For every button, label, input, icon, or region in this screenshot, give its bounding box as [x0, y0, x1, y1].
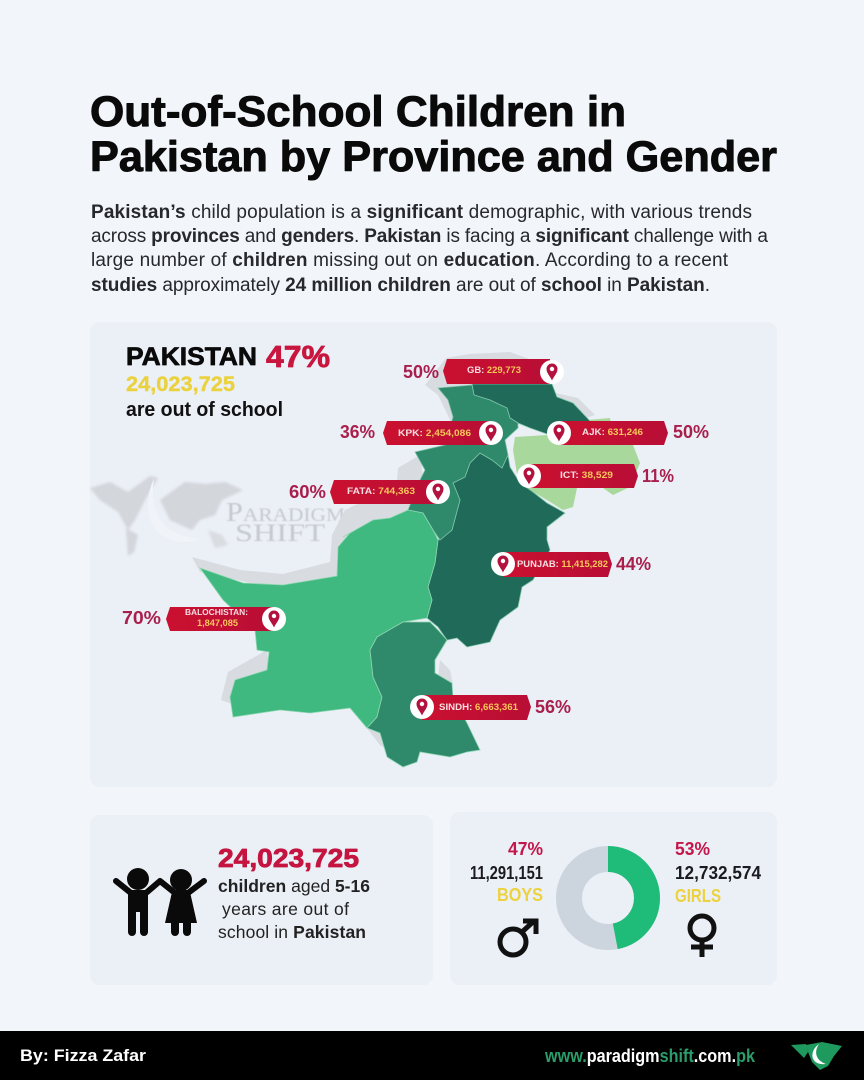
intro paragraph: large number of children missing out on education. According to a recent: [91, 250, 729, 271]
icon: two children holding hands: [116, 868, 204, 936]
callout: FATA: 60%: [289, 482, 326, 502]
intro paragraph: [91, 202, 768, 296]
callout: Balochistan: [122, 607, 286, 631]
panel: map: [90, 322, 777, 787]
callout: Sindh: [410, 695, 571, 720]
watermark logo: [90, 476, 345, 556]
title: [90, 88, 777, 181]
callout: Punjab: [491, 552, 651, 577]
boys stats: BOYS: [497, 885, 543, 905]
map of Pakistan: [192, 352, 640, 767]
callout: Balochistan: 1,847,085: [197, 618, 239, 629]
callout: Punjab: PUNJAB: 11,415,282: [517, 559, 608, 570]
title: Out-of-School Children in: [90, 88, 626, 136]
national headline: 47%: [266, 339, 330, 374]
icon: male symbol: [500, 921, 536, 955]
callout: GB: GB: 229,773: [467, 365, 521, 376]
callout: FATA: [289, 480, 450, 504]
callout: FATA: FATA: 744,363: [347, 486, 415, 497]
callout: ICT: ICT: 38,529: [560, 470, 613, 481]
callout: Punjab: 44%: [616, 554, 651, 574]
logo: green world map with crescent: [791, 1042, 842, 1070]
region: Balochistan: [200, 510, 438, 728]
boys stats: [470, 839, 543, 905]
callout: Sindh: SINDH: 6,663,361: [439, 702, 519, 713]
national headline: [126, 339, 330, 421]
national headline: 24,023,725: [126, 373, 235, 396]
map shadow: [192, 352, 595, 750]
girls stats: [675, 839, 761, 906]
watermark logo: SHIFT: [235, 520, 325, 547]
boys stats: 11,291,151: [470, 863, 543, 883]
footer bar: [0, 1031, 864, 1080]
region: Sindh: [367, 622, 480, 767]
boys stats: 47%: [508, 839, 543, 859]
national headline: PAKISTAN: [126, 343, 257, 371]
girls stats: GIRLS: [675, 886, 721, 906]
panel: gender split: [450, 812, 777, 985]
author credit: By: Fizza Zafar: [20, 1046, 146, 1065]
girls stats: 12,732,574: [675, 863, 761, 883]
icon: female symbol: [690, 916, 714, 957]
region: Punjab: [427, 453, 565, 647]
callout: Sindh: 56%: [535, 697, 571, 717]
region: KPK and FATA: [408, 385, 518, 540]
children total text: school in Pakistan: [218, 922, 366, 942]
callout: AJK: AJK: 631,246: [582, 427, 643, 438]
callout: ICT: [517, 464, 674, 488]
watermark logo: PARADIGM: [226, 497, 345, 527]
national headline: are out of school: [126, 399, 283, 421]
website url: www.paradigmshift.com.pk: [544, 1046, 756, 1066]
children total text: years are out of: [222, 899, 349, 919]
intro paragraph: studies approximately 24 million children are out of school in Pakistan.: [91, 275, 710, 296]
callout: Balochistan: 70%: [122, 608, 161, 628]
callout: GB: 50%: [403, 362, 439, 382]
children total text: children aged 5-16: [218, 876, 370, 896]
callout: AJK: [547, 421, 709, 445]
callout: GB: [403, 359, 564, 384]
callout: ICT: 11%: [642, 466, 674, 486]
panel: children total: [90, 815, 433, 985]
intro paragraph: Pakistan’s child population is a significant demographic, with various trends: [91, 202, 752, 223]
girls stats: 53%: [675, 839, 710, 859]
donut chart: [569, 859, 647, 937]
children total text: [218, 843, 370, 942]
callout: KPK: 36%: [340, 422, 375, 442]
title: Pakistan by Province and Gender: [90, 133, 777, 181]
intro paragraph: across provinces and genders. Pakistan is facing a significant challenge with a: [91, 226, 768, 247]
callout: Balochistan: BALOCHISTAN:: [185, 607, 248, 617]
children total text: 24,023,725: [218, 843, 359, 873]
region: Gilgit-Baltistan: [472, 384, 590, 436]
callout: AJK: 50%: [673, 422, 709, 442]
region: AJK and ICT: [560, 418, 612, 436]
callout: KPK: KPK: 2,454,086: [398, 428, 471, 439]
callout: KPK: [340, 421, 503, 445]
